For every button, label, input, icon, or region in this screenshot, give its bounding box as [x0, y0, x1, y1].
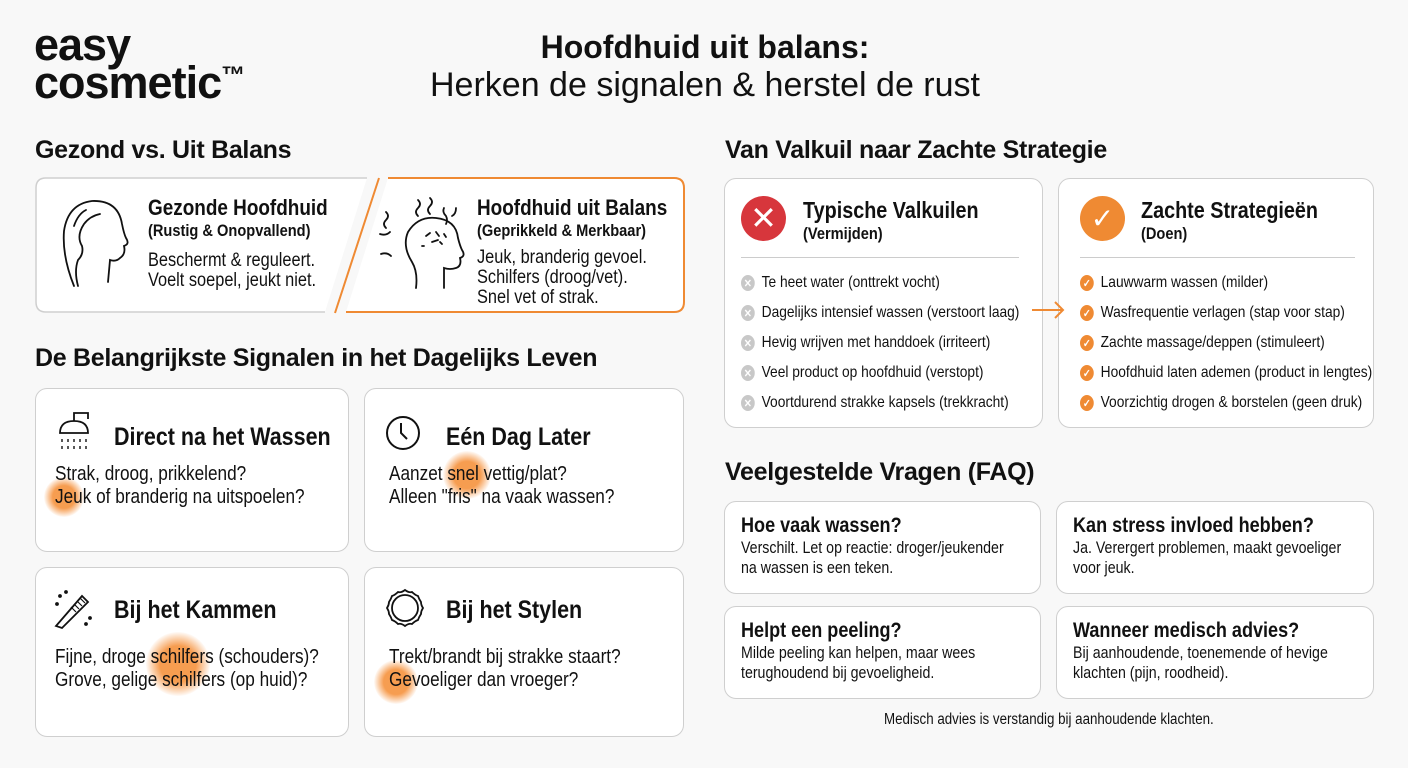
- list: strategieen: Hoofdhuid laten ademen (product in lengtes): [1101, 364, 1372, 381]
- heading: valkuil naar strategie: Van Valkuil naar Zachte Strategie: [725, 136, 1107, 164]
- text: out of balance: (Geprikkeld & Merkbaar): [477, 221, 646, 240]
- panel: strategieen: [1058, 178, 1374, 428]
- faq: peeling: [724, 606, 1041, 699]
- panel: valkuilen: (Vermijden): [803, 224, 883, 243]
- faq: stress: Ja. Verergert problemen, maakt gevoeliger: [1073, 539, 1341, 557]
- list: valkuilen: Veel product op hoofdhuid (verstopt): [762, 364, 983, 381]
- text: out of balance: Schilfers (droog/vet).: [477, 267, 628, 288]
- text: healthy: Gezonde Hoofdhuid: [148, 195, 328, 220]
- text: out of balance: Hoofdhuid uit Balans: [477, 195, 667, 220]
- title: Herken de signalen & herstel de rust: [430, 66, 980, 104]
- faq: hoe vaak: [724, 501, 1041, 594]
- card: direct na wassen: [35, 388, 349, 552]
- list: strategieen: ✓: [1083, 338, 1091, 350]
- list: valkuilen: ✕: [744, 398, 752, 410]
- list: valkuilen: Voortdurend strakke kapsels (trekkracht): [762, 394, 1009, 411]
- card: direct na wassen: Strak, droog, prikkelend?: [55, 463, 246, 485]
- faq: hoe vaak: Hoe vaak wassen?: [741, 514, 902, 537]
- icon: irritated head: [380, 198, 464, 288]
- panel: valkuilen: [724, 178, 1043, 428]
- panel: valkuilen: Typische Valkuilen: [803, 197, 979, 223]
- icon: healthy head: [64, 201, 128, 286]
- list: strategieen: Zachte massage/deppen (stimuleert): [1101, 334, 1325, 351]
- list: valkuilen: ✕: [744, 278, 752, 290]
- logo: easy: [34, 19, 130, 70]
- faq: hoe vaak: na wassen is een teken.: [741, 559, 893, 577]
- card: direct na wassen: Jeuk of branderig na uitspoelen?: [55, 486, 305, 508]
- faq: stress: voor jeuk.: [1073, 559, 1135, 577]
- card: bij het kammen: Grove, gelige schilfers (op huid)?: [55, 669, 307, 691]
- faq: medisch advies: [1056, 606, 1374, 699]
- text: out of balance: Jeuk, branderig gevoel.: [477, 247, 647, 268]
- list: valkuilen: Hevig wrijven met handdoek (irriteert): [762, 334, 990, 351]
- card: een dag later: Eén Dag Later: [446, 423, 591, 451]
- card: bij het kammen: [35, 567, 349, 737]
- list: strategieen: ✓: [1083, 308, 1091, 320]
- faq: peeling: Milde peeling kan helpen, maar wees: [741, 644, 975, 662]
- faq: medisch advies: Wanneer medisch advies?: [1073, 619, 1299, 642]
- card: bij het stylen: [364, 567, 684, 737]
- faq: stress: [1056, 501, 1374, 594]
- list: valkuilen: [741, 274, 1019, 411]
- text: out of balance: Snel vet of strak.: [477, 287, 599, 308]
- footnote: Medisch advies is verstandig bij aanhoudende klachten.: [884, 711, 1214, 728]
- card: bij het stylen: Bij het Stylen: [446, 596, 582, 624]
- list: valkuilen: Dagelijks intensief wassen (verstoort laag): [762, 304, 1019, 321]
- logo: [34, 19, 244, 108]
- list: valkuilen: ✕: [744, 308, 752, 320]
- text: healthy: Beschermt & reguleert.: [148, 250, 315, 271]
- card: bij het stylen: Gevoeliger dan vroeger?: [389, 669, 578, 691]
- card: direct na wassen: Direct na het Wassen: [114, 423, 331, 451]
- card: bij het kammen: Fijne, droge schilfers (schouders)?: [55, 646, 319, 668]
- panel: strategieen: (Doen): [1141, 224, 1187, 243]
- list: strategieen: ✓: [1083, 278, 1091, 290]
- heading: gezond vs uit balans: Gezond vs. Uit Balans: [35, 136, 291, 164]
- panel: comparison: [35, 177, 685, 314]
- list: strategieen: Wasfrequentie verlagen (stap voor stap): [1101, 304, 1345, 321]
- list: valkuilen: ✕: [744, 368, 752, 380]
- list: valkuilen: ✕: [744, 338, 752, 350]
- text: healthy: (Rustig & Onopvallend): [148, 221, 310, 240]
- heading: signalen: De Belangrijkste Signalen in het Dagelijks Leven: [35, 344, 597, 372]
- faq: peeling: Helpt een peeling?: [741, 619, 902, 642]
- list: strategieen: Voorzichtig drogen & borstelen (geen druk): [1101, 394, 1362, 411]
- card: bij het stylen: Trekt/brandt bij strakke staart?: [389, 646, 621, 668]
- text: healthy: [148, 195, 328, 291]
- title: Hoofdhuid uit balans:: [541, 29, 869, 65]
- icon: orange check: [1080, 196, 1125, 241]
- faq: medisch advies: Bij aanhoudende, toenemende of hevige: [1073, 644, 1328, 662]
- text: healthy: Voelt soepel, jeukt niet.: [148, 270, 316, 291]
- list: strategieen: Lauwwarm wassen (milder): [1101, 274, 1268, 291]
- faq: hoe vaak: Verschilt. Let op reactie: droger/jeukender: [741, 539, 1004, 557]
- faq: stress: Kan stress invloed hebben?: [1073, 514, 1314, 537]
- card: een dag later: Alleen "fris" na vaak wassen?: [389, 486, 614, 508]
- heading: FAQ: Veelgestelde Vragen (FAQ): [725, 458, 1034, 486]
- icon: orange check: ✓: [1091, 203, 1114, 234]
- list: strategieen: ✓: [1083, 368, 1091, 380]
- faq: medisch advies: klachten (pijn, roodheid).: [1073, 664, 1228, 682]
- arrow: [1032, 301, 1064, 319]
- logo: cosmetic™: [34, 57, 244, 108]
- card: bij het kammen: Bij het Kammen: [114, 596, 276, 624]
- text: out of balance: [477, 195, 667, 308]
- list: strategieen: ✓: [1083, 398, 1091, 410]
- title: [430, 29, 980, 104]
- icon: red x: [741, 196, 786, 241]
- panel: strategieen: Zachte Strategieën: [1141, 197, 1318, 223]
- list: strategieen: [1080, 274, 1372, 411]
- icon: red x: ✕: [750, 200, 777, 236]
- card: een dag later: Aanzet snel vettig/plat?: [389, 463, 567, 485]
- card: een dag later: [364, 388, 684, 552]
- faq: peeling: terughoudend bij gevoeligheid.: [741, 664, 934, 682]
- list: valkuilen: Te heet water (onttrekt vocht): [762, 274, 940, 291]
